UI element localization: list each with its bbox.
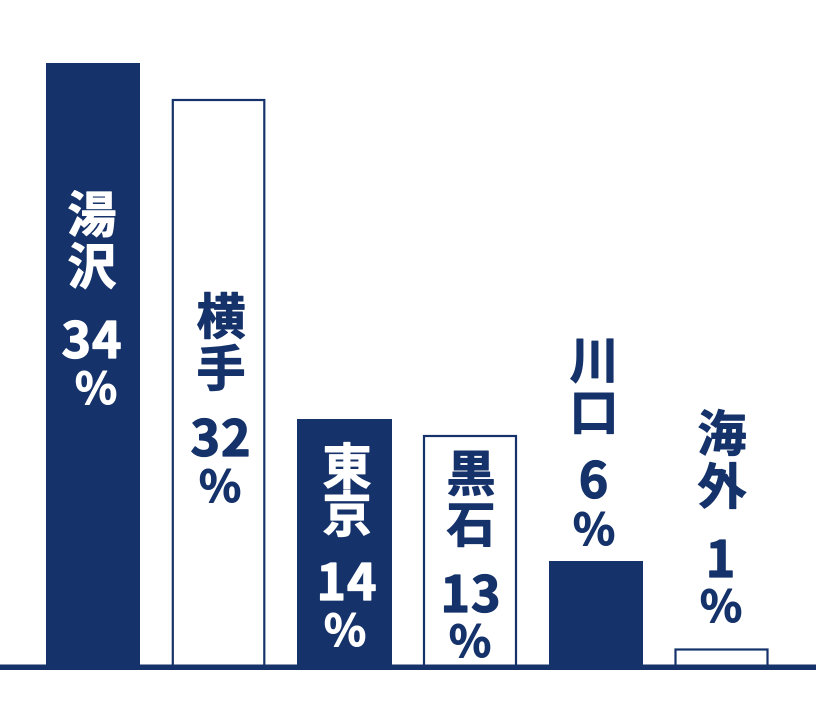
bar: Yuzawa 34%: 湯 — [67, 176, 117, 247]
bar: Kawaguchi 6%: 6 — [579, 441, 609, 513]
bar: Tokyo 14% — [297, 419, 392, 667]
bar: Yokote 32%: 横 — [196, 278, 246, 349]
bar: Tokyo 14%: 東 — [322, 428, 372, 499]
bar: Overseas 1%: 1 — [706, 520, 736, 592]
bar: Tokyo 14%: 京 — [322, 476, 372, 547]
bar: Kawaguchi 6%: 口 — [569, 374, 619, 445]
bar: Kawaguchi 6%: % — [573, 494, 615, 558]
bar: Kuroishi 13% — [424, 435, 516, 670]
bar: Kawaguchi 6%: 川 — [569, 322, 619, 393]
bar: Tokyo 14%: 14 — [316, 543, 378, 615]
bar: Yokote 32%: 手 — [196, 330, 246, 401]
bar: Overseas 1% — [676, 395, 768, 666]
bar: Yuzawa 34%: 沢 — [67, 228, 117, 299]
bar: Yuzawa 34% — [46, 63, 140, 667]
bar: Yokote 32%: % — [199, 451, 241, 515]
bar: Yokote 32%: 32 — [190, 399, 252, 471]
bar: Yuzawa 34%: % — [75, 353, 117, 417]
bar: Overseas 1%: 外 — [697, 448, 747, 519]
bar: Kuroishi 13%: 石 — [446, 486, 496, 557]
bar: Kuroishi 13%: 黒 — [446, 435, 496, 506]
bar: Kuroishi 13%: 13 — [440, 555, 502, 627]
bar: Kuroishi 13%: % — [449, 606, 491, 670]
bar: Yuzawa 34%: 34 — [62, 301, 122, 373]
bar: Tokyo 14%: % — [324, 595, 366, 659]
bar: Overseas 1%: 海 — [697, 395, 747, 466]
baseline axis — [0, 664, 816, 670]
bar: Overseas 1%: % — [700, 571, 742, 635]
bar: Kawaguchi 6% — [549, 322, 643, 667]
bar: Yokote 32% — [173, 100, 264, 667]
